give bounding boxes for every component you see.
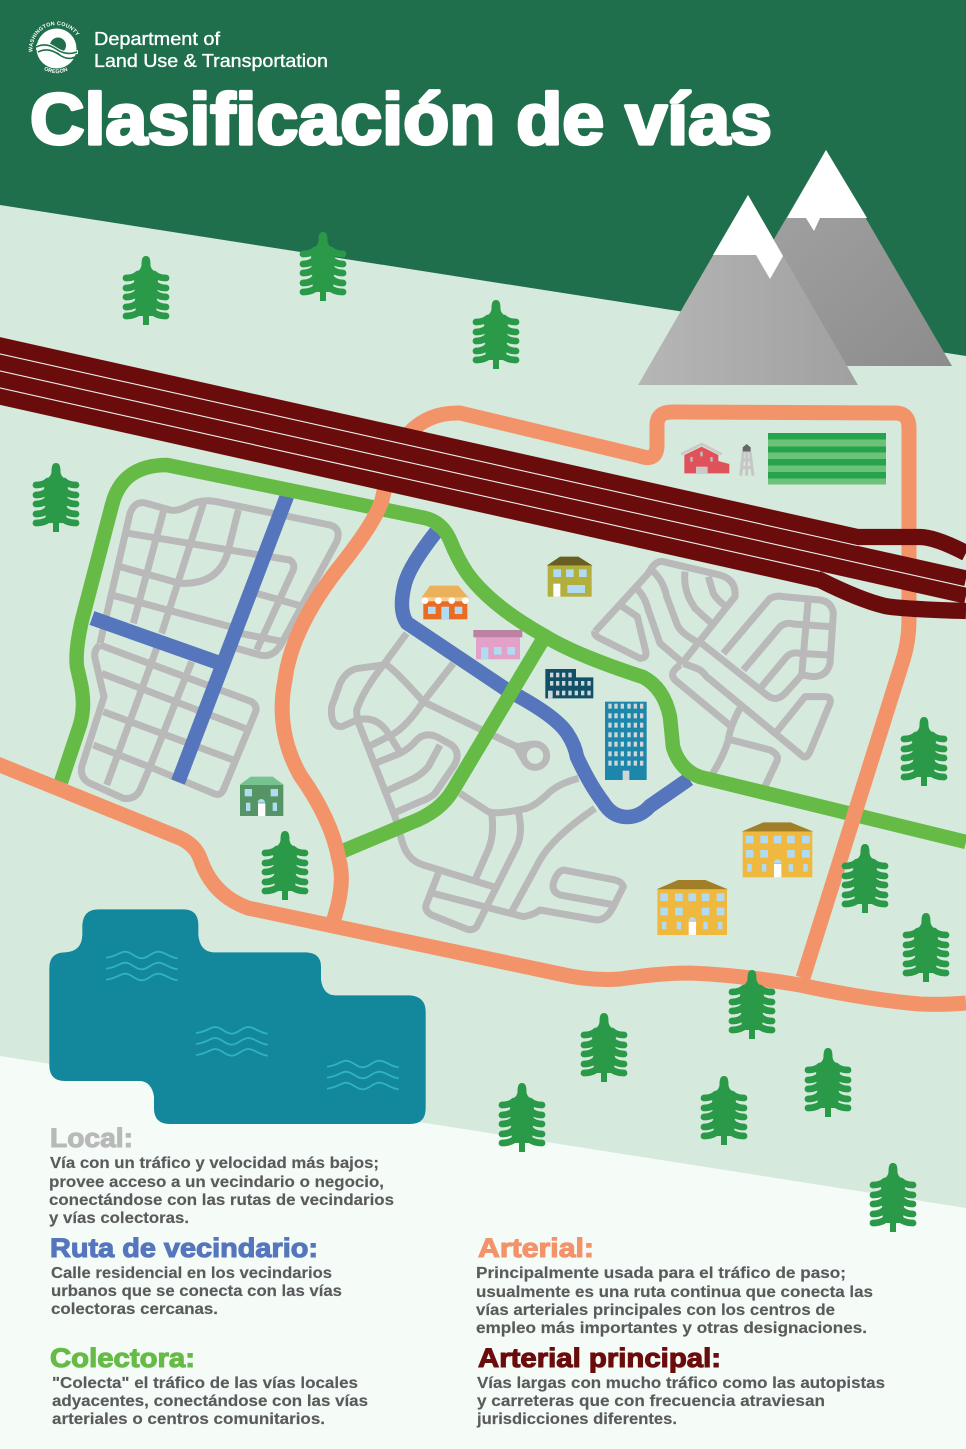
icon: crop field	[768, 433, 886, 484]
icon: mountains	[638, 150, 952, 385]
legend: Ruta de vecindario: urbanos que se conecta con las vías	[51, 1283, 342, 1300]
legend: Local: provee acceso a un vecindario o negocio,	[49, 1174, 384, 1191]
background: dark green sky	[0, 0, 966, 356]
icon: yellow mansion south	[656, 880, 728, 935]
legend: Ruta de vecindario: colectoras cercanas.	[51, 1301, 218, 1318]
road: local streets	[81, 501, 833, 930]
icons: trees	[36, 232, 946, 1232]
local streets: east neighbourhood	[595, 561, 833, 790]
legend: Arterial principal: jurisdicciones diferentes.	[476, 1411, 677, 1428]
legend: Arterial: empleo más importantes y otras designaciones.	[476, 1320, 867, 1337]
legend: Local: Vía con un tráfico y velocidad más bajos;	[50, 1155, 379, 1172]
road: principal arterials	[0, 341, 966, 611]
icon: navy office block	[545, 669, 593, 698]
icon: water tower	[741, 444, 753, 476]
icon: green house	[239, 777, 284, 816]
legend: Arterial principal: Arterial principal:	[478, 1343, 721, 1373]
legend: Arterial principal: y carreteras que con frecuencia atraviesan	[477, 1393, 825, 1410]
legend: Arterial: Arterial:	[478, 1233, 594, 1263]
legend: Ruta de vecindario: Calle residencial en los vecindarios	[51, 1265, 332, 1282]
legend: Arterial: Principalmente usada para el tráfico de paso;	[476, 1265, 846, 1282]
legend: Colectora: "Colecta" el tráfico de las vías locales	[52, 1375, 358, 1392]
header: department name	[94, 29, 328, 71]
legend: Colectora: Colectora:	[50, 1343, 195, 1373]
legend: Local: conectándose con las rutas de vecindarios	[49, 1192, 394, 1209]
legend: Ruta de vecindario: Ruta de vecindario:	[50, 1233, 318, 1263]
road: arterials	[0, 412, 966, 1004]
icon: barn	[681, 444, 729, 473]
legend: Colectora	[50, 1343, 368, 1428]
logo: Washington County seal: OREGON	[44, 67, 68, 74]
legend: Arterial principal: Vías largas con mucho tráfico como las autopistas	[477, 1375, 885, 1392]
icon: olive house	[547, 557, 593, 597]
logo: Washington County seal: WASHINGTON COUNTY	[28, 21, 80, 52]
road: collectors	[61, 465, 966, 851]
icon: yellow mansion east	[742, 822, 813, 877]
legend: Arterial: vías arteriales principales con los centros de	[476, 1302, 835, 1319]
road: neighbourhood routes	[92, 496, 689, 817]
local streets: central neighbourhood	[331, 633, 623, 930]
legend: Colectora: arteriales o centros comunitarios.	[52, 1411, 325, 1428]
legend: Local: Local:	[50, 1123, 133, 1153]
legend: Colectora: adyacentes, conectándose con las vías	[52, 1393, 368, 1410]
background: pale lower text area	[0, 1056, 966, 1449]
title: Clasificación de vías	[30, 80, 772, 160]
legend: Arterial: usualmente es una ruta continua que conecta las	[476, 1284, 873, 1301]
legend: Local: y vías colectoras.	[49, 1210, 189, 1227]
icon: lake	[49, 909, 426, 1124]
legend: Arterial	[476, 1233, 873, 1337]
header: department name: Department of	[94, 29, 221, 49]
legend: Arterial principal	[476, 1343, 885, 1428]
legend: Local	[49, 1123, 394, 1227]
header: department name: Land Use & Transportation	[94, 51, 328, 71]
logo: Washington County seal	[28, 21, 80, 74]
icon: blue tower	[605, 702, 647, 780]
icon: shop	[422, 586, 469, 619]
legend: Ruta de vecindario	[50, 1233, 342, 1318]
icon: pink store	[473, 630, 522, 659]
local streets: west neighbourhood	[81, 501, 338, 799]
